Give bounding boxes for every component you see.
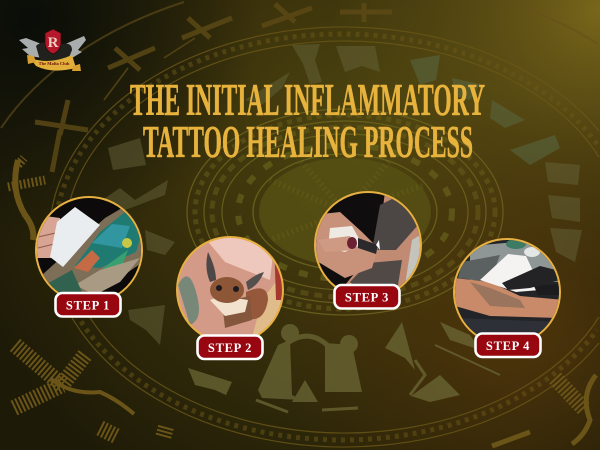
decorative gold birds xyxy=(8,158,596,446)
logo shield xyxy=(45,29,61,54)
decorative gray figures lower xyxy=(188,322,500,412)
step 4 badge xyxy=(476,334,540,357)
step 1 photo xyxy=(35,196,143,294)
decorative gray figures upper xyxy=(95,44,582,345)
step 2 badge: STEP 2 xyxy=(208,341,252,355)
decorative crosses along the upper ring xyxy=(35,3,392,172)
step 1 badge xyxy=(56,293,120,316)
logo wings xyxy=(19,36,86,60)
logo banner xyxy=(30,55,76,71)
logo: R xyxy=(48,35,59,51)
step 1 badge: STEP 1 xyxy=(66,298,110,312)
step 3 photo xyxy=(314,191,422,288)
step 2 badge xyxy=(198,336,262,359)
step 4 photo xyxy=(453,238,561,336)
step 4 badge: STEP 4 xyxy=(486,339,530,353)
step 3 badge: STEP 3 xyxy=(345,290,389,304)
step 2 photo xyxy=(176,236,285,345)
title xyxy=(130,75,485,167)
step 3 badge xyxy=(334,285,400,308)
logo xyxy=(19,29,86,71)
logo: The Mafia Club xyxy=(39,61,70,66)
